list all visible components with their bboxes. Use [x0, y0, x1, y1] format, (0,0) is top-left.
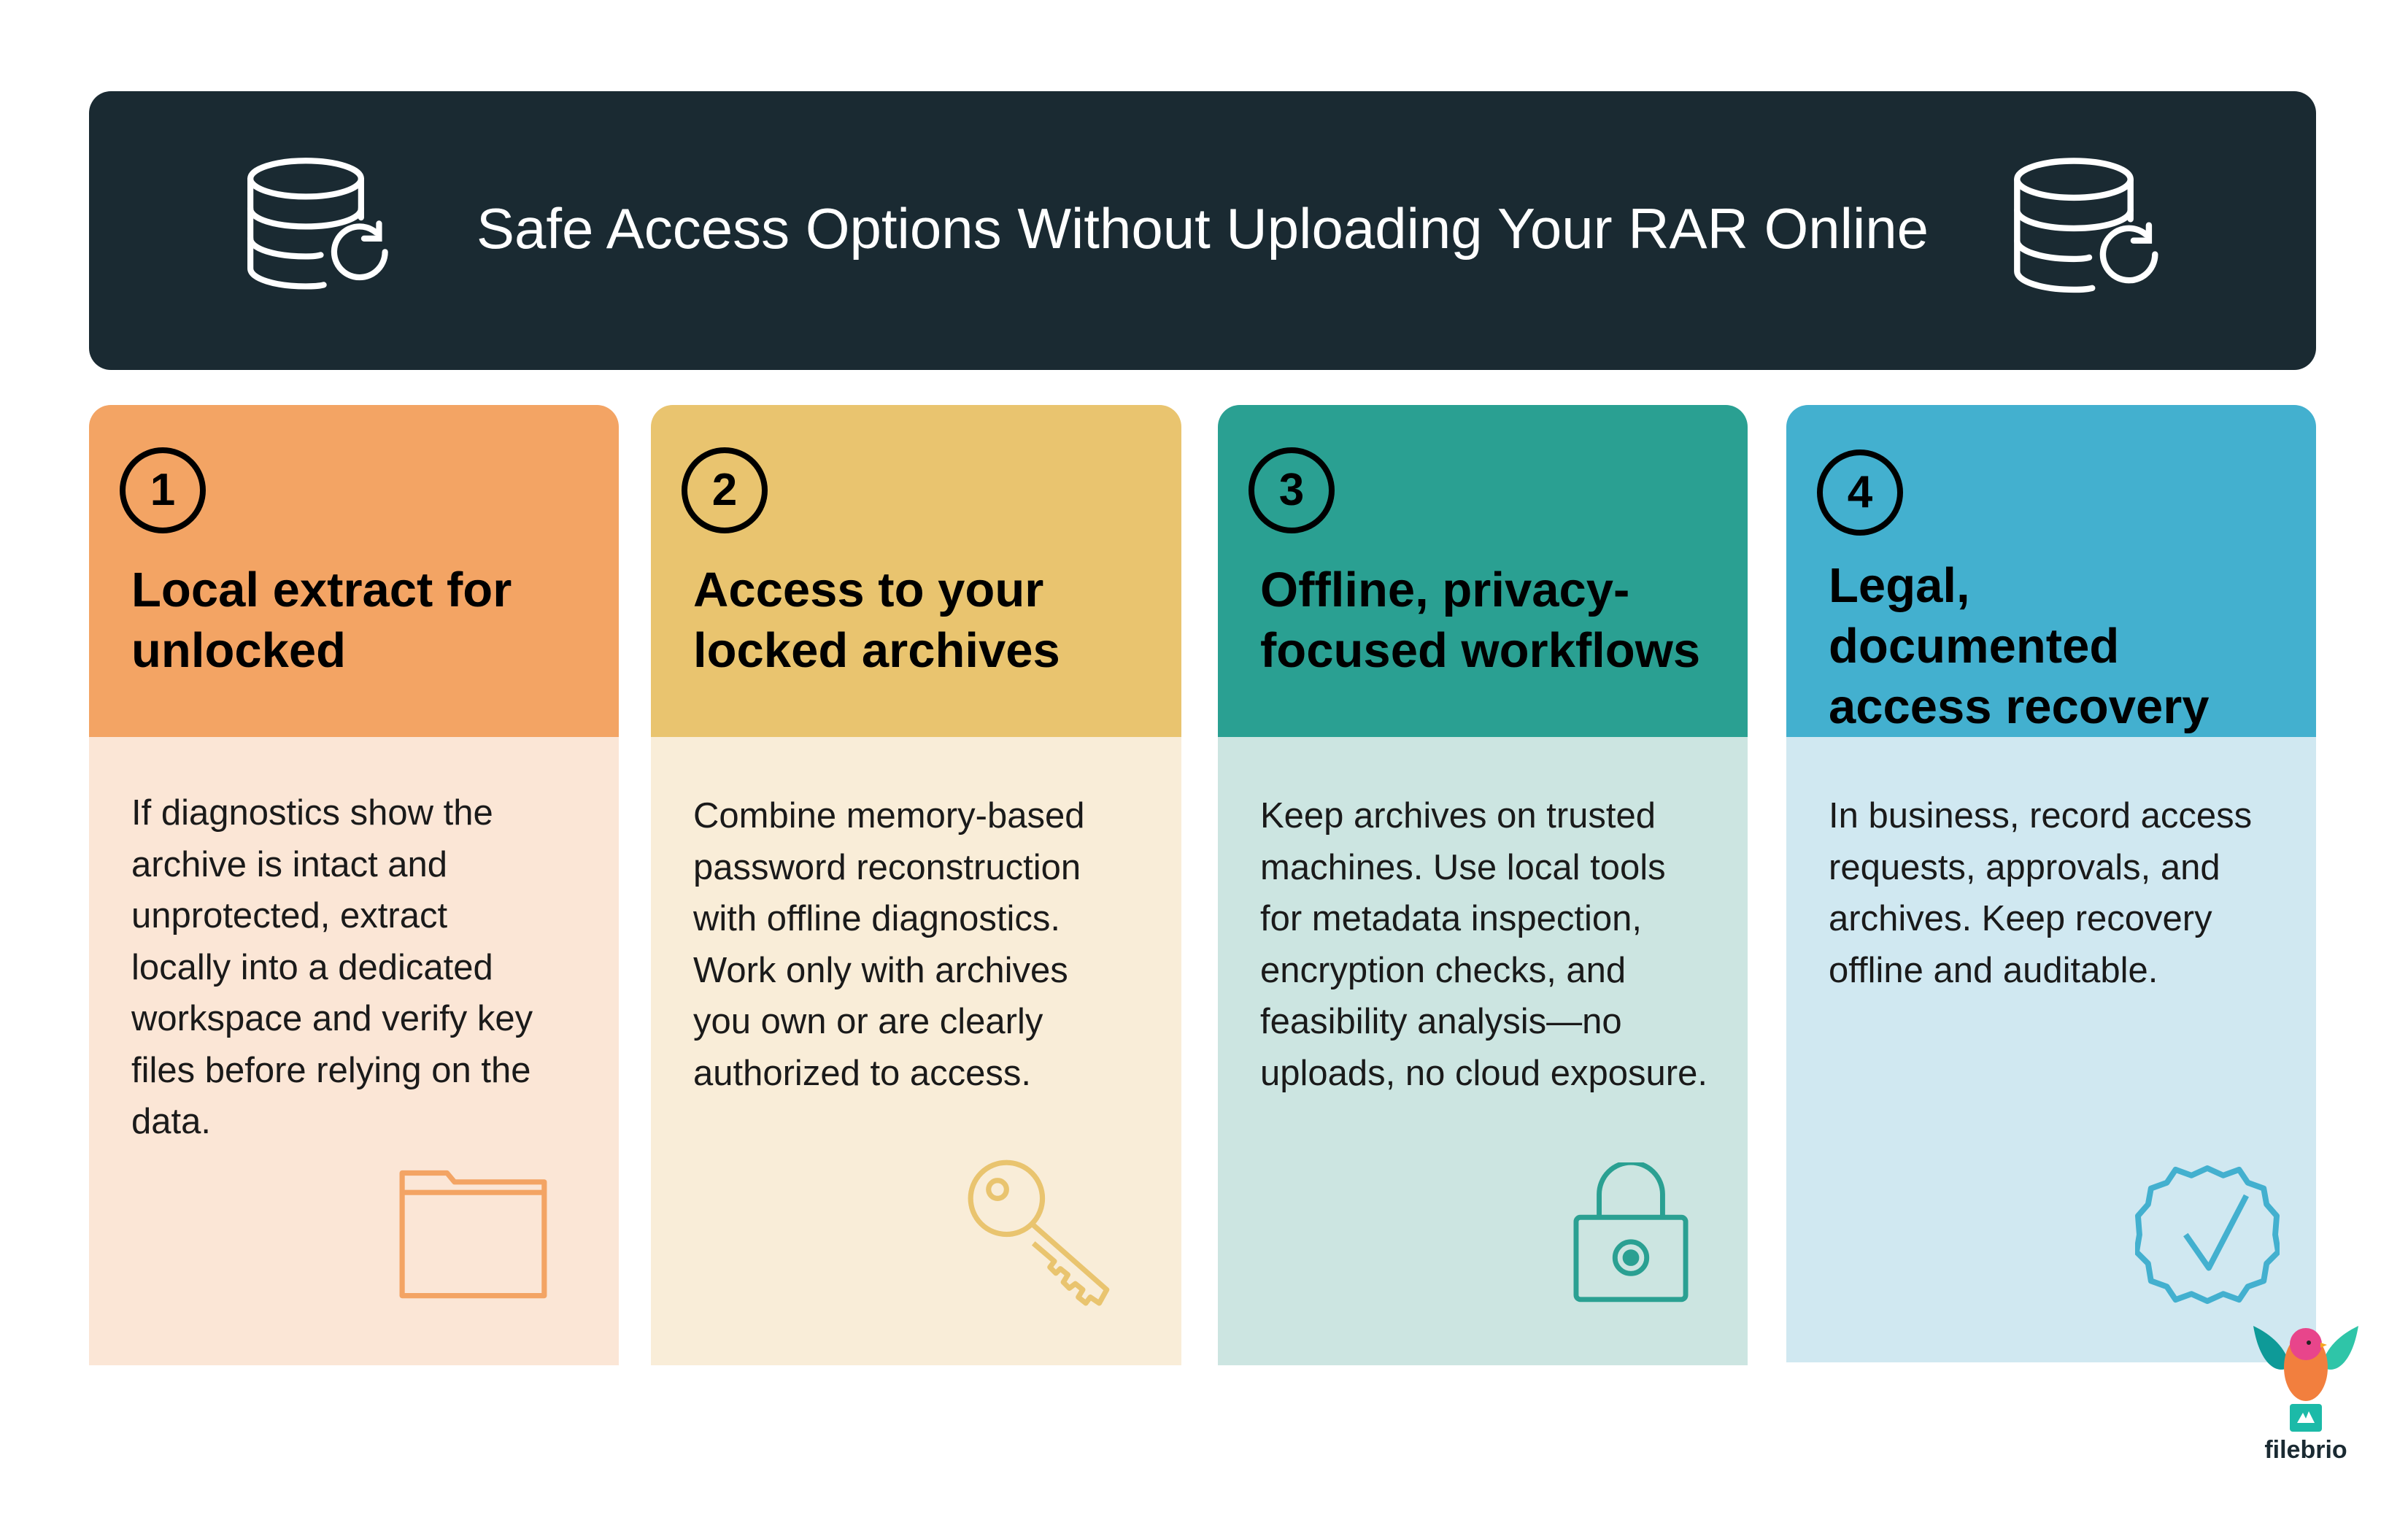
body 1 — [131, 793, 533, 1141]
panel: card 2 — [651, 405, 1181, 1365]
title: Safe Access Options Without Uploading Your RAR Online — [476, 196, 1929, 261]
body 1: archive is intact and — [131, 845, 447, 884]
panel: card 3 — [1218, 405, 1748, 1365]
icon: badge check — [2135, 1165, 2280, 1304]
heading 4 — [1829, 558, 2210, 734]
body 4 — [1829, 796, 2252, 989]
body 4: archives. Keep recovery — [1829, 899, 2212, 938]
icon: database right — [2014, 158, 2158, 293]
number 2 — [682, 447, 768, 533]
panel: card 1 — [89, 405, 619, 1365]
icon: key — [968, 1160, 1109, 1306]
panel: card 4 — [1786, 405, 2316, 1362]
logo: filebrio — [2253, 1326, 2358, 1464]
heading 3 — [1260, 563, 1700, 678]
heading 4: Legal, — [1829, 558, 1970, 613]
heading 3: Offline, privacy- — [1260, 563, 1629, 617]
body 2: with offline diagnostics. — [693, 899, 1060, 938]
body 4: In business, record access — [1829, 796, 2252, 836]
body 3: for metadata inspection, — [1260, 899, 1642, 938]
heading 1: unlocked — [131, 623, 346, 678]
heading 3: focused workflows — [1260, 623, 1700, 678]
header banner — [89, 91, 2316, 370]
body 3: Keep archives on trusted — [1260, 796, 1656, 836]
heading 1 — [131, 563, 512, 678]
body 1: locally into a dedicated — [131, 947, 493, 987]
body 2 — [693, 796, 1084, 1093]
body 3: encryption checks, and — [1260, 950, 1626, 989]
number 1 — [120, 447, 206, 533]
body 2: password reconstruction — [693, 848, 1081, 887]
body 4: requests, approvals, and — [1829, 848, 2220, 887]
icon: folder — [400, 1170, 547, 1299]
body 2: Work only with archives — [693, 950, 1068, 989]
number 4 — [1817, 449, 1903, 536]
number 2: 2 — [712, 465, 737, 515]
heading 2: locked archives — [693, 623, 1060, 678]
heading 2 — [693, 563, 1060, 678]
body 4: offline and auditable. — [1829, 950, 2158, 989]
body 2: you own or are clearly — [693, 1002, 1043, 1041]
icon: database left — [247, 158, 388, 289]
body 1: workspace and verify key — [131, 999, 533, 1038]
heading 1: Local extract for — [131, 563, 512, 617]
body 3: feasibility analysis—no — [1260, 1002, 1622, 1041]
body 1: If diagnostics show the — [131, 793, 493, 833]
icon: lock — [1573, 1162, 1689, 1302]
body 3 — [1260, 796, 1707, 1093]
body 1: unprotected, extract — [131, 896, 447, 935]
body 1: data. — [131, 1102, 211, 1141]
body 3: uploads, no cloud exposure. — [1260, 1054, 1707, 1093]
logo text: filebrio — [2264, 1436, 2347, 1464]
heading 4: documented — [1829, 619, 2119, 674]
body 3: machines. Use local tools — [1260, 848, 1666, 887]
heading 4: access recovery — [1829, 679, 2210, 734]
number 4: 4 — [1848, 467, 1872, 517]
body 2: authorized to access. — [693, 1054, 1031, 1093]
body 1: files before relying on the — [131, 1051, 531, 1090]
number 3: 3 — [1279, 465, 1304, 515]
heading 2: Access to your — [693, 563, 1043, 617]
number 3 — [1249, 447, 1335, 533]
number 1: 1 — [150, 465, 175, 515]
body 2: Combine memory-based — [693, 796, 1084, 836]
